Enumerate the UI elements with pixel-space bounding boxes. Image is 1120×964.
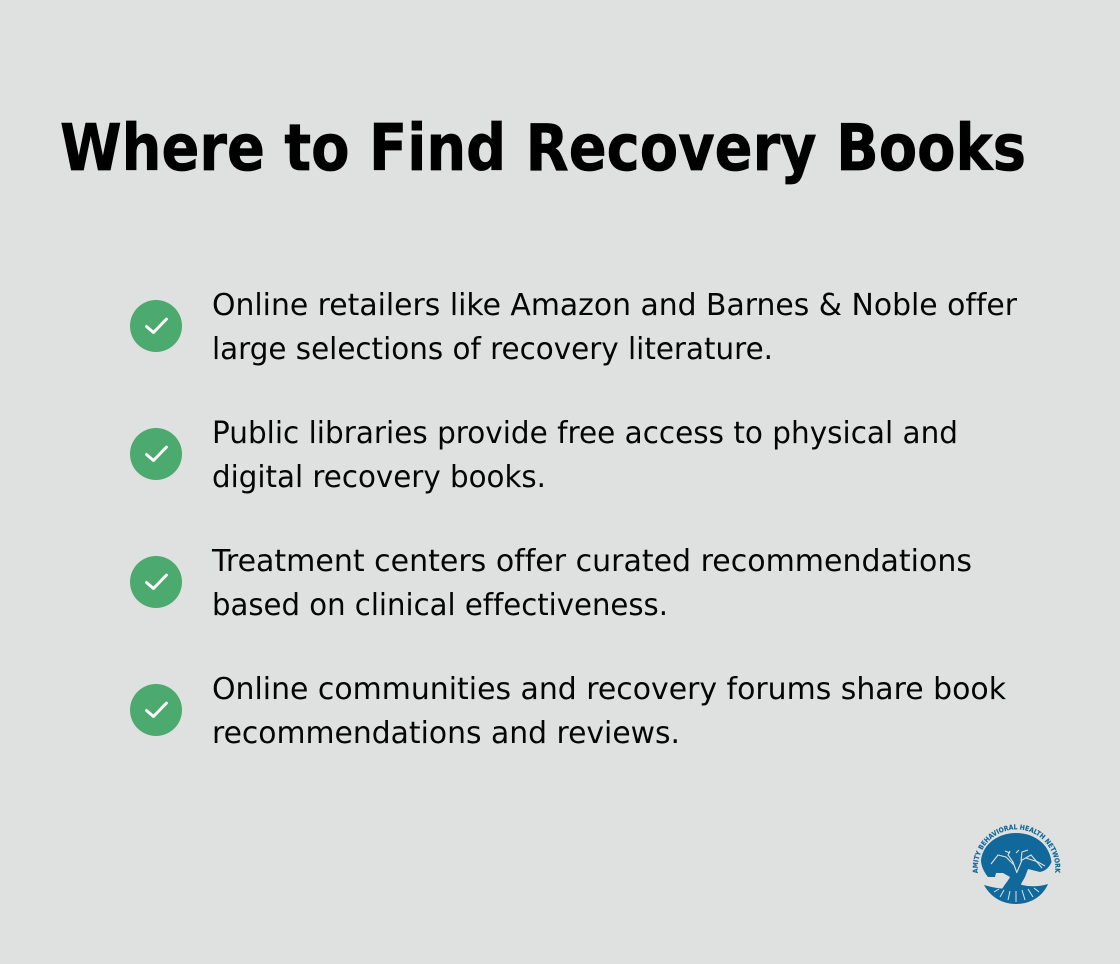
- icon: check 1: [130, 300, 182, 352]
- text: public libraries: digital recovery books.: [212, 460, 546, 495]
- icon: check 3: [130, 556, 182, 608]
- item 4: [130, 672, 1006, 751]
- icon: check 2: [130, 428, 182, 480]
- logo tree: [981, 833, 1052, 904]
- checklist: [130, 288, 1017, 751]
- text: online retailers: Online retailers like Amazon and Barnes & Noble offer: [212, 288, 1017, 323]
- text: online retailers: large selections of recovery literature.: [212, 332, 773, 367]
- text: treatment centers: Treatment centers offer curated recommendations: [211, 544, 972, 579]
- text: online communities: Online communities and recovery forums share book: [212, 672, 1006, 707]
- logo arc text: AMITY BEHAVIORAL HEALTH NETWORK: [972, 824, 1060, 874]
- text: online communities: [212, 672, 1006, 751]
- text: treatment centers: [211, 544, 972, 623]
- text: online retailers: [212, 288, 1017, 367]
- text: public libraries: [212, 416, 958, 495]
- text: public libraries: Public libraries provide free access to physical and: [212, 416, 958, 451]
- text: online communities: recommendations and reviews.: [212, 716, 680, 751]
- icon: check 4: [130, 684, 182, 736]
- item 2: [130, 416, 958, 495]
- item 1: [130, 288, 1017, 367]
- logo: Amity Behavioral Health Network: [972, 824, 1060, 904]
- logo roots: [984, 884, 1048, 904]
- text: treatment centers: based on clinical effectiveness.: [212, 588, 668, 623]
- item 3: [130, 544, 972, 623]
